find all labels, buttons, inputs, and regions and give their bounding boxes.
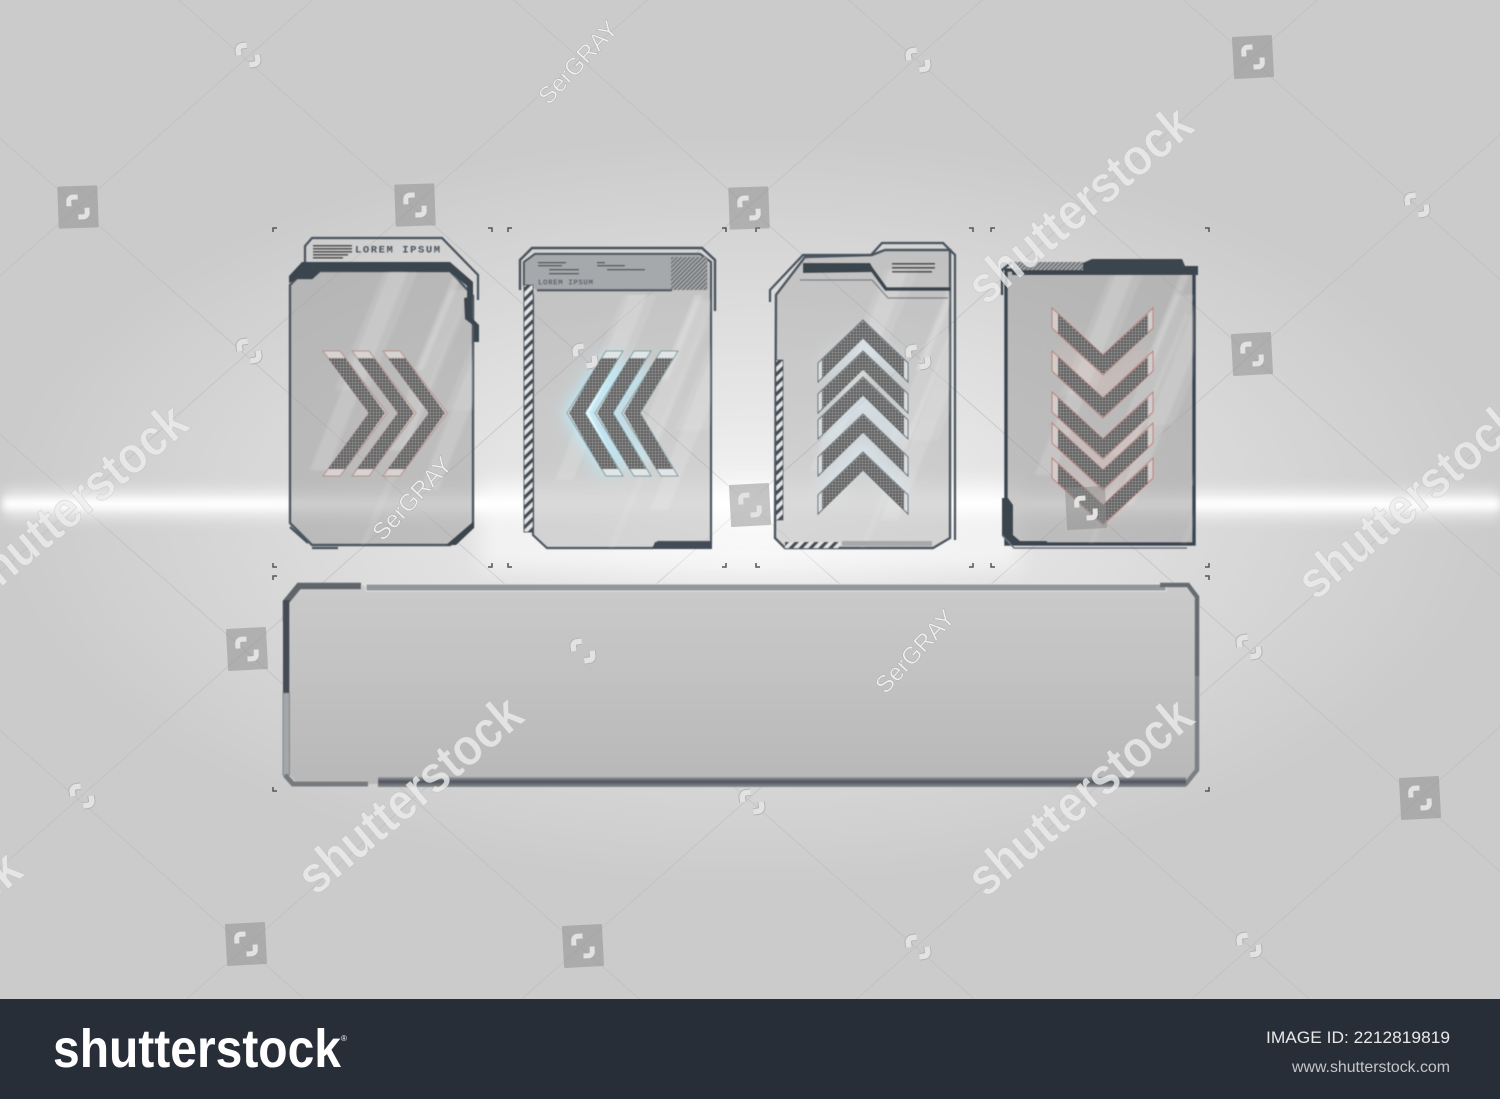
card 4 body	[1006, 270, 1194, 544]
card 1 micro lines	[313, 245, 352, 259]
card 4 top dark band	[1012, 259, 1198, 275]
up chevron 2	[818, 351, 908, 413]
footer bar	[0, 999, 1500, 1099]
glow core	[583, 370, 605, 456]
watermark small icons	[72, 44, 1427, 958]
up chevron 1	[818, 320, 908, 382]
card 2 body	[524, 254, 711, 548]
card 3 micro lines	[892, 263, 935, 273]
card 3 dark band	[803, 263, 875, 273]
card 3 body	[775, 250, 950, 548]
footer image id: IMAGE ID: 2212819819	[1266, 1028, 1450, 1047]
card 4 glass reflections	[1038, 274, 1194, 544]
watermark squares	[57, 35, 1441, 968]
card 2 heading: LOREM IPSUM	[538, 280, 593, 288]
card 4: down chevrons	[1000, 258, 1199, 550]
panel top tab	[286, 586, 361, 622]
card 2: left chevrons	[518, 246, 717, 550]
card 2 outer frame	[520, 248, 715, 311]
watermark wordmarks: shutterstock	[956, 94, 1204, 316]
watermark wordmarks: shutterstock	[956, 686, 1204, 908]
light streak	[3, 480, 1500, 570]
card 4 top-left corner	[1002, 262, 1012, 295]
left chevron 3	[622, 351, 678, 476]
card 1 side connector	[464, 296, 479, 342]
panel fill	[287, 586, 1196, 784]
panel left dark edge	[283, 600, 290, 693]
right chevron 3	[383, 351, 447, 476]
card 1 bottom corner	[446, 521, 474, 545]
right chevron 2	[352, 351, 416, 476]
panel right lower edge	[1185, 676, 1197, 785]
card 1 dark band	[289, 262, 473, 297]
down chevron 2	[1052, 351, 1153, 418]
card 2 hatch block	[671, 257, 707, 290]
glow	[825, 340, 900, 490]
card 4 left lower bracket	[1002, 498, 1047, 545]
card 2 bottom stripe	[652, 542, 712, 549]
wide bottom panel	[283, 584, 1197, 787]
contributor watermarks: SerGRAY	[533, 16, 624, 110]
panel bottom rail	[378, 777, 1186, 787]
down chevron 4	[1052, 423, 1153, 490]
down chevron 1	[1052, 308, 1153, 375]
footer logo: shutterstock	[53, 1019, 342, 1079]
card 2 left stripes	[524, 285, 533, 532]
card 2 glass reflections	[607, 295, 712, 548]
right chevron 1	[323, 351, 387, 476]
card 4 bottom line	[1002, 535, 1187, 548]
down chevron 5	[1052, 458, 1153, 525]
down chevron 3	[1052, 392, 1153, 459]
left chevron 2	[595, 351, 651, 476]
panel left light edge	[283, 693, 290, 775]
contributor watermarks: SerGRAY	[367, 452, 458, 546]
footer registered mark: ®	[341, 1034, 347, 1043]
red glow	[1060, 350, 1148, 510]
card 3 outer frame	[770, 243, 955, 540]
card 1 header frame	[290, 238, 478, 548]
card 3 left stripes	[776, 360, 783, 520]
panel top rail	[366, 584, 1166, 591]
card 1: right chevrons	[288, 236, 480, 550]
watermark wordmarks: shutterstock	[286, 684, 534, 906]
card 3 bottom rule	[842, 541, 932, 546]
card 3 bottom stripes	[785, 542, 840, 548]
card 2 header rule	[537, 289, 672, 291]
card 2 micro lines	[538, 262, 645, 274]
card 3: up chevrons	[768, 241, 957, 550]
panel bottom left tab	[285, 775, 368, 784]
up chevron 3	[818, 377, 908, 439]
card 1 heading: LOREM IPSUM	[355, 244, 440, 256]
footer url: www.shutterstock.com	[1291, 1059, 1450, 1076]
up chevron 4	[818, 414, 908, 476]
card 2 header panel	[525, 255, 708, 290]
card 1 glass reflections	[312, 271, 474, 545]
left chevron 1	[567, 351, 623, 476]
card 3 tab divider	[870, 267, 951, 289]
card 3 glass reflections	[843, 270, 950, 548]
contributor watermarks: SerGRAY	[870, 605, 961, 699]
glow	[575, 360, 640, 470]
card 4 top hatch	[1013, 262, 1083, 270]
panel top right corner	[1160, 585, 1197, 676]
card 1 body	[290, 271, 473, 545]
card 3 tab thin line	[800, 280, 948, 298]
contributor watermarks	[367, 16, 961, 699]
corner brackets	[273, 228, 1209, 791]
up chevron 5	[818, 452, 908, 514]
